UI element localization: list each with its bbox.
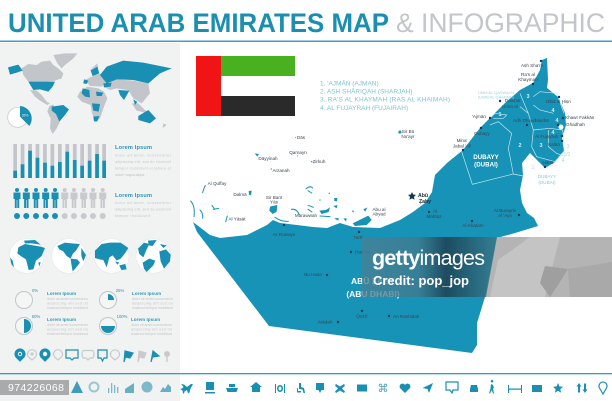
place names: islands: Sir Banī [266, 195, 283, 200]
place names: north-east: Kalbā [548, 142, 560, 147]
emirate numbers: 4 [555, 118, 559, 124]
place names: north-east: Khawr Fakkān [565, 115, 595, 120]
text block: emirates list: 1. 'AJMĀN (AJMAN) [320, 80, 379, 88]
place names: north-east: Ḩattā [543, 160, 554, 165]
emirate numbers: 3 [526, 94, 530, 100]
emirate numbers: 1 [532, 165, 535, 171]
chart: world pie: 35% [22, 114, 28, 118]
place names: central and southern: Ḩamīm [355, 250, 370, 254]
icon: up and down arrows [576, 383, 588, 393]
label: Dubai emirate [473, 154, 500, 168]
text block: 0% note: adipiscing elit sed do [47, 302, 88, 306]
emirate numbers: 3 [539, 143, 543, 149]
label: Abu Dhabi emirate: (ABU DHABI) [346, 289, 400, 299]
place names: islands: Marawwah [295, 213, 318, 218]
place names: islands: Dāyyinah [258, 156, 278, 161]
text block: 50% note: Lorem Ipsum [47, 317, 76, 322]
map: United Arab Emirates [191, 58, 595, 353]
icon: heart [400, 384, 410, 393]
place names: north-east: Ra's al [521, 72, 535, 77]
globe: Americas [52, 239, 86, 273]
place names: islands: Yās [270, 200, 279, 204]
icon: plane [180, 384, 193, 394]
place names: islands: Al Quffay [208, 181, 227, 186]
place names: central and southern: Bu Hasa [304, 272, 322, 277]
text block: bar chart lorem ipsum: adipiscing elit, sed do eiusmod [115, 160, 171, 164]
text block: people lorem ipsum: adipiscing elit, sed do eiusmod [115, 208, 171, 212]
place names: central and southern: Mahfaz [426, 214, 442, 219]
panel: left sidebar background [0, 43, 180, 401]
flag of the UAE [196, 56, 295, 116]
globes [9, 239, 171, 273]
chart: 50% dial [16, 314, 40, 334]
place names: islands: Abu al [372, 207, 386, 212]
icon: command key: ⌘ [378, 383, 388, 395]
place names: north-east: Al 'Ayn [498, 213, 512, 218]
text block: 0% note: Lorem Ipsum [47, 291, 76, 296]
place names: islands: Nu'ayr [401, 134, 415, 139]
place names: islands: Ẓirkuh [313, 159, 326, 164]
icon: cross [335, 384, 345, 393]
place names: islands [208, 129, 415, 222]
place names: north-east: 'Ajmān [472, 114, 486, 119]
text block: bar chart lorem ipsum: dolor sit amet, consectetur [115, 154, 172, 158]
label: Abu Dhabi emirate: ABŪ ẒABY [351, 276, 395, 286]
label: Dubai exclave: DUBAYY [538, 174, 556, 179]
label: Abu Dhabi emirate [346, 276, 400, 299]
watermark banner: gettyimages [372, 246, 485, 270]
text block: 0% note: dolor sit amet consectetur [47, 297, 89, 301]
text block: emirates list: 2. ASH SHĀRIQAH (SHARJAH) [320, 88, 412, 96]
text block: 25% note [132, 291, 174, 310]
place names: north-east: Khaymah [518, 77, 538, 82]
chart: 100% dial: 100% [117, 314, 128, 319]
place names: north-east: Umm al [502, 104, 518, 109]
chart: 25% dial [100, 288, 124, 308]
text block: 50% note [47, 317, 89, 336]
icon: car [470, 385, 478, 392]
icon: speech bubble [446, 382, 458, 393]
label: Dubai emirate: DUBAYY [473, 154, 500, 161]
globe: Africa [9, 239, 45, 273]
place names: islands: Al Yāsāt [228, 216, 246, 222]
emirate numbers: 1/2 [564, 152, 571, 158]
text block: 0% note: eiusmod tempor incididunt [47, 306, 88, 310]
icon: camera [532, 385, 542, 392]
place names: central and southern: Al [433, 208, 437, 214]
emirate numbers: 3 [567, 144, 570, 150]
place names: north-east: Jabal 'Ali [453, 144, 471, 148]
chart: 50% dial: 50% [32, 314, 40, 319]
place names: north-east: Al Buraymi [494, 208, 516, 213]
label: Abu Dhabi city: Ẓaby [419, 199, 431, 205]
text block: 100% note: dolor sit amet consectetur [131, 323, 173, 327]
icon: speech marker [316, 383, 324, 393]
place names: north-east: Dawḩat [505, 98, 521, 103]
label: Dubai emirate: (DUBAI) [474, 162, 498, 168]
text block: 25% note: eiusmod tempor incididunt [132, 306, 173, 310]
place names: central and southern: Quzā' [356, 314, 368, 318]
icon: restaurant [275, 384, 285, 393]
emirate borders [462, 92, 565, 184]
chart: 100% dial [100, 314, 128, 334]
emirate numbers: 4 [562, 158, 565, 164]
icon: column chart [108, 383, 118, 393]
chart: 0% dial [16, 288, 38, 308]
text block: bar chart lorem ipsum: Lorem Ipsum [115, 145, 152, 151]
text block: 50% note: dolor sit amet consectetur [47, 323, 89, 327]
label: Umm al Qaywayn [478, 90, 515, 100]
place names: central and southern: Arādah [318, 320, 333, 324]
place names: central and southern: An Rashidah [393, 314, 420, 319]
icon: area chart [160, 384, 171, 392]
text block: bar chart lorem ipsum [115, 145, 172, 177]
place names: central and southern: Ar Ruways [273, 232, 296, 237]
place names: islands: Dās [297, 135, 306, 140]
text block: bar chart lorem ipsum: dolore magna aliqua. [115, 173, 145, 177]
title: UNITED ARAB EMIRATES MAP [8, 8, 389, 38]
icon: pie chart [142, 382, 152, 392]
place names: north-east: Ghadhah [566, 122, 585, 127]
reference number strip: 974226068 [8, 382, 64, 394]
icon: star [553, 383, 563, 393]
place names: north-east: Dubayy [474, 131, 490, 136]
text block: bar chart lorem ipsum: tempor incididunt ut labore et [115, 166, 171, 170]
icon: mail [357, 384, 367, 392]
place names: north-east: Mina' [457, 138, 468, 143]
map shape [193, 58, 566, 353]
place names: islands: Abyad [372, 212, 386, 216]
text block: people lorem ipsum: tempor incididunt [115, 214, 150, 218]
pictogram: people [14, 188, 106, 219]
emirate numbers: 4 [551, 130, 555, 136]
globe: Atlantic [136, 239, 171, 273]
text block: 25% note: Lorem Ipsum [132, 291, 161, 296]
icon: house [250, 382, 262, 392]
label: Dubai exclave: (DUBAI) [538, 180, 556, 185]
icon: bed [508, 385, 522, 393]
place names: north-east [453, 63, 595, 228]
icon: donut chart [90, 382, 98, 392]
globe: Asia [94, 239, 129, 273]
label: Abu Dhabi city: Abū [418, 193, 428, 199]
emirate numbers [498, 94, 571, 171]
place names: north-east: Dibā al Ḩiṣn [546, 99, 571, 104]
text block: people lorem ipsum: dolor sit amet, consectetur [115, 201, 172, 205]
icon: train [205, 382, 215, 394]
chart: 0% dial: 0% [32, 288, 38, 293]
text block: emirates list: 3. RA'S AL KHAYMAH (RAS AL KHAIMAH) [320, 96, 450, 104]
world map [8, 53, 172, 134]
place names: islands: Arzanah [272, 168, 290, 173]
place names: north-east: Al Fujayrah [535, 134, 559, 139]
place names: central and southern [273, 208, 442, 324]
icon: location pin [599, 382, 607, 394]
reference number strip [0, 380, 69, 395]
place names: north-east: Al Khatam [462, 223, 484, 228]
icon: pyramid chart [71, 381, 83, 393]
icon: navigation arrow [422, 383, 433, 393]
bar chart [13, 144, 106, 178]
icon: accessibility [297, 383, 305, 393]
emirate numbers: 1 [498, 112, 502, 118]
place names: north-east: Ash Sha'm [521, 63, 543, 68]
title [8, 8, 605, 38]
icon: pedestrian [489, 380, 494, 394]
label: Abu Dhabi city [418, 193, 431, 205]
place names: islands: Dalmā [233, 192, 247, 197]
chart: 25% dial: 25% [116, 288, 124, 293]
text block: 25% note: adipiscing elit sed do [132, 302, 173, 306]
place dots [283, 60, 564, 323]
place names: islands: Qarnayn [289, 150, 307, 155]
emirate numbers: 4 [551, 108, 555, 114]
icon: growth chart [125, 383, 134, 393]
chart: world pie [8, 106, 32, 127]
text block: 100% note [131, 317, 173, 336]
text block: 100% note: Lorem Ipsum [131, 317, 160, 322]
text block: 25% note: dolor sit amet consectetur [132, 297, 174, 301]
text block: 50% note: eiusmod tempor incididunt [47, 332, 88, 336]
place names: north-east: Masfūt [535, 118, 550, 123]
place names: islands: Sir Bū [402, 129, 415, 134]
place names: central and southern: Tarīf [354, 235, 363, 240]
title: & INFOGRAPHIC [396, 8, 605, 38]
text block: emirates list [320, 80, 450, 112]
text block: 50% note: adipiscing elit sed do [47, 328, 88, 332]
text block: emirates list: 4. AL FUJAYRAH (FUJAIRAH) [320, 105, 408, 112]
label: Umm al Qaywayn: UMM AL QAYWAYN [478, 90, 514, 95]
place names: north-east: Adh Dhayd [513, 118, 536, 123]
text block: 100% note: eiusmod tempor incididunt [131, 332, 172, 336]
icons: map pins, speech bubbles and flags [15, 349, 170, 362]
label: Dubai exclave [538, 174, 556, 185]
text block: 100% note: adipiscing elit sed do [131, 328, 172, 332]
coastal islands [191, 132, 400, 226]
watermark banner [362, 237, 612, 297]
text block: people lorem ipsum [115, 193, 172, 218]
label: Umm al Qaywayn: (UMM AL QAIWAIN) [478, 94, 515, 100]
text block: 0% note [47, 291, 89, 310]
watermark banner: Credit: pop_jop [373, 273, 469, 288]
icon: ship [226, 384, 238, 392]
emirate numbers: 2 [518, 143, 522, 149]
text block: people lorem ipsum: Lorem Ipsum [115, 193, 152, 199]
panel: bottom icon row [180, 380, 607, 395]
